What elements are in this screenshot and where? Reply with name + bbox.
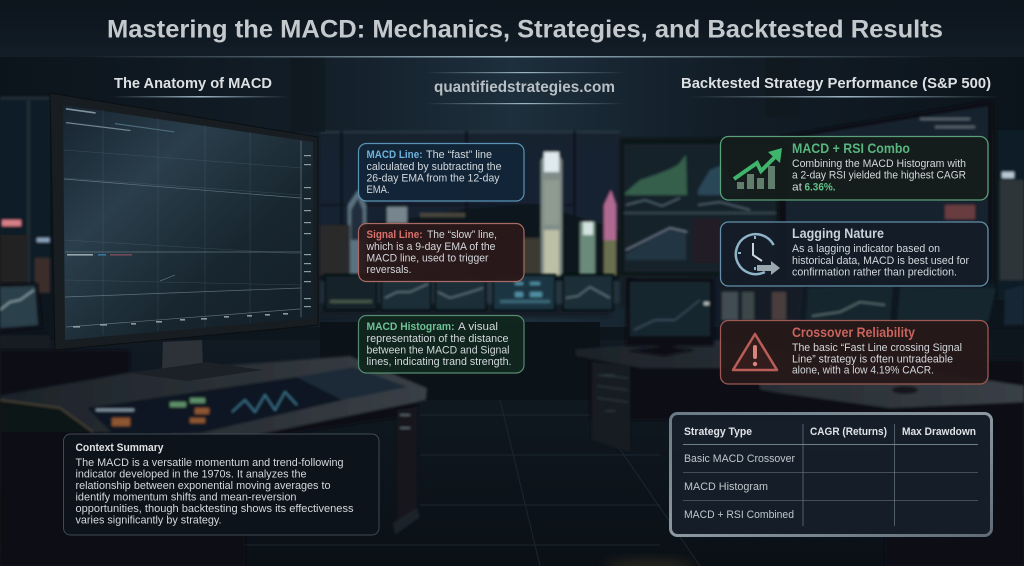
callout: MACD Histogram	[358, 316, 524, 373]
panel: context summary: indicator developed in the 1970s. It analyzes the	[76, 468, 306, 480]
far-left monitor and desk	[0, 283, 50, 349]
card: Crossover Reliability: The basic “Fast Line crossing Signal	[792, 342, 962, 354]
callout: Signal Line: which is a 9-day EMA of the	[366, 241, 496, 253]
callout: MACD Histogram: A visual	[458, 321, 498, 333]
icon: rising arrow with bars	[734, 148, 782, 189]
callout: Signal Line	[358, 224, 524, 282]
card: Crossover Reliability: Line” strategy is often untradeable	[792, 354, 953, 366]
callout: MACD Histogram: representation of the distance	[366, 333, 508, 345]
card: Lagging Nature: confirmation rather than prediction.	[792, 266, 957, 278]
skyline window	[320, 131, 620, 281]
table: strategy comparison: Strategy Type	[684, 426, 752, 438]
card: MACD + RSI Combo: 6.36%.	[804, 182, 836, 194]
card: Crossover Reliability	[720, 320, 988, 384]
table: strategy comparison: CAGR (Returns)	[810, 426, 887, 438]
left section heading: The Anatomy of MACD	[114, 76, 272, 92]
callout: MACD Histogram: MACD Histogram:	[366, 321, 454, 333]
card: Lagging Nature: As a lagging indicator based on	[792, 243, 940, 255]
left monitor	[50, 93, 318, 381]
callout: MACD Histogram: lines, indicating trand strength.	[366, 356, 512, 368]
monitor stand	[130, 340, 263, 381]
panel: context summary: identify momentum shifts and mean-reversion	[76, 492, 296, 504]
table: strategy comparison: Max Drawdown	[902, 426, 976, 438]
website label: quantifiedstrategies.com	[434, 79, 615, 96]
callout: MACD Line: The “fast” line	[426, 149, 492, 161]
pillars	[290, 57, 325, 132]
table: strategy comparison	[670, 414, 992, 536]
card: MACD + RSI Combo: a 2-day RSI yielded the highest CAGR	[792, 170, 966, 182]
card: Crossover Reliability: alone, with a low 4.19% CACR.	[792, 364, 934, 376]
callout: Signal Line: The “slow” line,	[427, 229, 497, 241]
right section heading: Backtested Strategy Performance (S&P 500)	[681, 76, 991, 92]
panel: context summary: opportunities, though backtesting shows its effectiveness	[76, 503, 354, 515]
callout: Signal Line: reversals.	[366, 264, 412, 276]
table: strategy comparison: MACD + RSI Combined	[684, 509, 794, 521]
monitor screen	[63, 105, 313, 340]
floor and back wall	[0, 340, 1024, 566]
table: strategy comparison: Basic MACD Crossover	[684, 453, 795, 465]
card: Crossover Reliability: Crossover Reliability	[792, 324, 915, 340]
callout: MACD Histogram: between the MACD and Signal	[366, 344, 510, 356]
callout: MACD Line: EMA.	[366, 184, 390, 196]
panel: context summary	[64, 434, 379, 535]
mid row monitors	[320, 275, 630, 317]
callout: MACD Line: calculated by subtracting the	[366, 161, 502, 173]
panel: context summary: The MACD is a versatile momentum and trend-following	[76, 457, 344, 469]
card: MACD + RSI Combo	[720, 136, 988, 200]
right window	[985, 130, 1024, 300]
left desk with touch panels	[0, 350, 427, 566]
far-right lower desk	[990, 330, 1024, 360]
callout: Signal Line: MACD line, used to trigger	[366, 252, 489, 264]
icon: clock with arrow	[733, 231, 780, 277]
panel: context summary: relationship between exponential moving averages to	[76, 480, 330, 492]
tilted rear monitor	[780, 100, 993, 282]
card: MACD + RSI Combo: Combining the MACD Histogram with	[792, 158, 966, 170]
callout: MACD Line	[358, 144, 524, 201]
callout: MACD Line: 26-day EMA from the 12-day	[366, 172, 500, 184]
card: MACD + RSI Combo: MACD + RSI Combo	[792, 140, 910, 156]
left window	[0, 97, 50, 295]
panel: context summary: varies significantly by strategy.	[76, 514, 222, 526]
monitor bezel	[50, 93, 318, 350]
callout: Signal Line: Signal Line:	[366, 229, 422, 241]
panel: context summary: Context Summary	[76, 442, 164, 454]
table: strategy comparison: MACD Histogram	[684, 481, 768, 493]
callout: MACD Line: MACD Line:	[366, 149, 422, 161]
card: Lagging Nature	[720, 222, 988, 286]
card: Lagging Nature: historical data, MACD is best used for	[792, 255, 969, 267]
card: MACD + RSI Combo: at	[792, 182, 802, 194]
card: Lagging Nature: Lagging Nature	[792, 225, 884, 241]
page title: Mastering the MACD: Mechanics, Strategies, and Backtested Results	[107, 16, 943, 44]
icon: warning triangle	[733, 334, 777, 370]
right monitors cluster	[620, 100, 1024, 356]
right desk	[575, 340, 1024, 566]
